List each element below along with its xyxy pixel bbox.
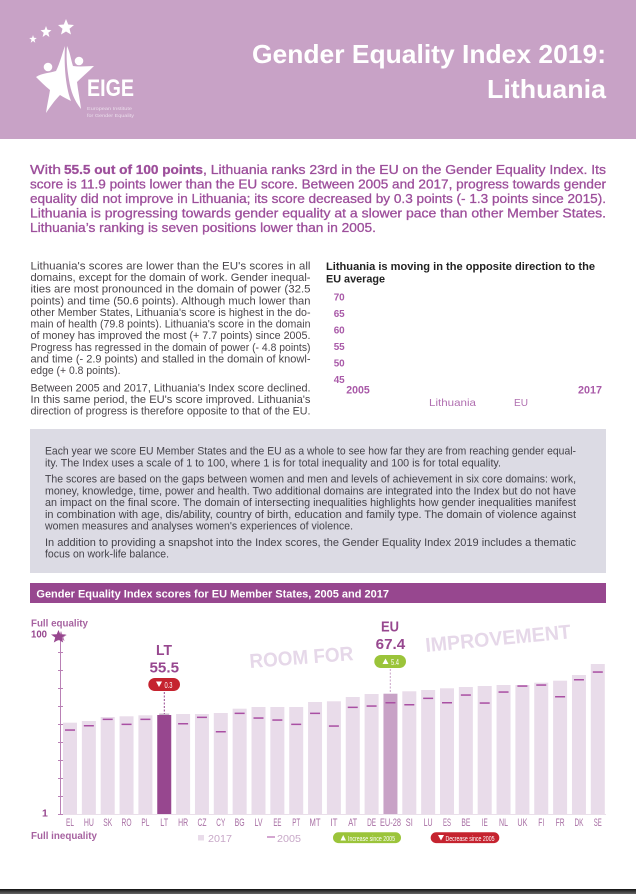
logo: EIGE: European Institute xyxy=(87,106,132,112)
country labels: EL xyxy=(66,817,74,829)
section heading bar: Gender Equality Index scores for EU Member States, 2005 and 2017 xyxy=(36,588,389,600)
country labels: FI xyxy=(538,817,544,829)
title: Gender Equality Index 2019: xyxy=(252,39,606,69)
country labels: HU xyxy=(84,817,94,829)
left column body text: domains, except for the domain of work. Gender inequal- xyxy=(30,272,311,284)
callout: EU xyxy=(374,619,406,693)
line chart panel: Lithuania vs EU xyxy=(326,261,602,409)
y axis with ticks xyxy=(58,637,63,814)
callout: Lithuania xyxy=(148,642,180,714)
legend: 2005 xyxy=(267,833,301,845)
country labels: SE xyxy=(594,817,602,829)
country labels: BE xyxy=(461,817,470,829)
chart heading xyxy=(326,261,595,286)
left column body text: main of health (79.8 points). Lithuania's score in the domain xyxy=(30,319,311,331)
chart heading: Lithuania is moving in the opposite direction to the xyxy=(326,261,595,273)
left column body text: Progress has regressed in the domain of power (- 4.8 points) xyxy=(30,342,310,354)
country labels: LT xyxy=(160,817,168,829)
country labels: LU xyxy=(424,817,433,829)
left column body text: ities are most pronounced in the domain of power (32.5 xyxy=(30,284,311,296)
country labels: UK xyxy=(517,817,528,829)
country labels: MT xyxy=(310,817,321,829)
intro text block: With xyxy=(30,162,61,177)
section heading bar xyxy=(30,583,606,603)
country labels: HR xyxy=(178,817,188,829)
legend: 2005: 2005 xyxy=(277,833,301,845)
bar chart: index scores xyxy=(31,618,606,845)
legend: decrease since 2005 xyxy=(431,832,499,843)
callout: EU: EU xyxy=(381,619,399,636)
bars 2017 xyxy=(63,664,605,814)
panel: about the index: ity. The Index uses a scale of 1 to 100, where 1 is for total inequality and 100 is for total equality. xyxy=(45,457,501,469)
country labels: ES xyxy=(443,817,451,829)
country labels: SI xyxy=(406,817,413,829)
country labels: EE xyxy=(273,817,281,829)
logo: EIGE xyxy=(29,19,135,119)
x axis labels xyxy=(346,384,602,396)
panel: about the index: Each year we score EU Member States and the EU as a whole to see how far they are from reaching gender equal- xyxy=(45,445,576,457)
panel: about the index: an impact on the final score. The domain of intersecting inequalities highlights how gender inequalities manifest xyxy=(45,497,576,509)
intro text block: 55.5 out of 100 points xyxy=(64,162,203,177)
callout: Lithuania: LT xyxy=(156,642,172,659)
country labels: RO xyxy=(122,817,132,829)
left column body text: In this same period, the EU's score improved. Lithuania's xyxy=(30,394,310,406)
country labels: CZ xyxy=(197,817,207,829)
axis value 1: 1 xyxy=(42,808,48,820)
legend: 2017 xyxy=(198,833,232,845)
left column body text: Between 2005 and 2017, Lithuania's Index score declined. xyxy=(30,382,310,394)
axis label: full equality: Full equality xyxy=(31,618,88,630)
intro text block: Lithuania’s ranking is seven positions lower than in 2005. xyxy=(30,220,376,235)
legend: increase since 2005: Increase since 2005 xyxy=(348,834,395,843)
logo: EIGE: for Gender Equality xyxy=(87,113,135,119)
left column body text: edge (+ 0.8 points). xyxy=(30,365,120,377)
x axis labels: 2017 xyxy=(578,384,602,396)
country labels: PT xyxy=(292,817,300,829)
legend: 2017: 2017 xyxy=(208,833,232,845)
intro text block xyxy=(30,162,607,235)
y axis labels: 65 xyxy=(334,308,345,320)
y axis labels: 60 xyxy=(334,325,345,337)
left column body text: other Member States, Lithuania's score is highest in the do- xyxy=(30,307,311,319)
country labels: PL xyxy=(141,817,149,829)
country labels: BG xyxy=(235,817,245,829)
panel: about the index xyxy=(30,429,606,573)
country labels: AT xyxy=(348,817,357,829)
chart legend: EU xyxy=(514,397,528,409)
intro text block: score is 11.9 points lower than the EU score. Between 2005 and 2017, progress towards gender xyxy=(30,176,607,192)
country labels: EU-28 xyxy=(380,817,401,829)
watermark: improvement: IMPROVEMENT xyxy=(424,621,572,657)
chart legend: Lithuania xyxy=(429,397,476,409)
chart legend xyxy=(429,397,528,409)
country labels: IT xyxy=(330,817,338,829)
left column body text: and time (- 2.9 points) and stalled in the domain of knowl- xyxy=(30,354,311,366)
callout: EU: 67.4 xyxy=(376,636,406,653)
country labels: NL xyxy=(499,817,508,829)
country labels: DK xyxy=(574,817,584,829)
callout: Lithuania: 0.3 xyxy=(164,681,173,690)
panel: about the index: focus on work-life balance. xyxy=(45,549,169,561)
y axis labels: 45 xyxy=(334,374,345,386)
country labels: LV xyxy=(254,817,263,829)
y axis labels xyxy=(334,292,345,386)
country labels: SK xyxy=(103,817,113,829)
axis label: full inequality: Full inequality xyxy=(31,830,97,842)
intro text block: equality did not improve in Lithuania; its score decreased by 0.3 points (- 1.3 points since 2015). xyxy=(30,191,606,206)
intro text block: , Lithuania ranks 23rd in the EU on the Gender Equality Index. Its xyxy=(203,162,607,177)
country labels: CY xyxy=(216,817,226,829)
y axis labels: 70 xyxy=(334,292,345,304)
left column body text xyxy=(30,260,311,418)
y axis labels: 55 xyxy=(334,341,345,353)
markers 2005 xyxy=(65,671,603,732)
y axis labels: 50 xyxy=(334,358,345,370)
header banner xyxy=(0,0,636,139)
panel: about the index: In addition to providing a snapshot into the Index scores, the Gender Equality Index 2019 includes a thematic xyxy=(45,537,577,549)
icon: double star at full equality xyxy=(51,630,67,642)
callout: EU: 5.4 xyxy=(391,658,399,667)
left column body text: of money has improved the most (+ 7.7 points) since 2005. xyxy=(30,330,310,342)
panel: about the index: money, knowledge, time, power and health. Two additional domains are integrated into the Index but do not have xyxy=(45,485,576,497)
logo: EIGE: EIGE xyxy=(87,75,134,102)
title xyxy=(252,39,607,104)
panel: about the index: The scores are based on the gaps between women and men and levels of achievement in six core domains: work, xyxy=(45,473,576,485)
country labels: IE xyxy=(482,817,488,829)
callout: Lithuania: 55.5 xyxy=(150,660,179,677)
chart heading: EU average xyxy=(326,274,385,286)
left column body text: points) and time (50.6 points). Although much lower than xyxy=(30,295,311,307)
country labels: FR xyxy=(556,817,565,829)
title: Lithuania xyxy=(487,74,607,104)
country labels: DE xyxy=(367,817,376,829)
left column body text: Lithuania's scores are lower than the EU's scores in all xyxy=(30,260,310,272)
legend: increase since 2005 xyxy=(333,832,401,843)
x axis labels: 2005 xyxy=(346,384,370,396)
axis value 100: 100 xyxy=(31,629,47,641)
left column body text: direction of progress is therefore opposite to that of the EU. xyxy=(30,406,311,418)
legend: decrease since 2005: Decrease since 2005 xyxy=(446,834,494,843)
panel: about the index: women measures and analyses women's experiences of violence. xyxy=(44,521,353,533)
country labels xyxy=(66,817,602,829)
intro text block: Lithuania is progressing towards gender equality at a slower pace than other Member States. xyxy=(30,206,606,220)
watermark: room for: ROOM FOR xyxy=(249,643,355,673)
panel: about the index: in combination with age, dis/ability, country of birth, education and family type. The domain of violence against xyxy=(45,509,576,521)
